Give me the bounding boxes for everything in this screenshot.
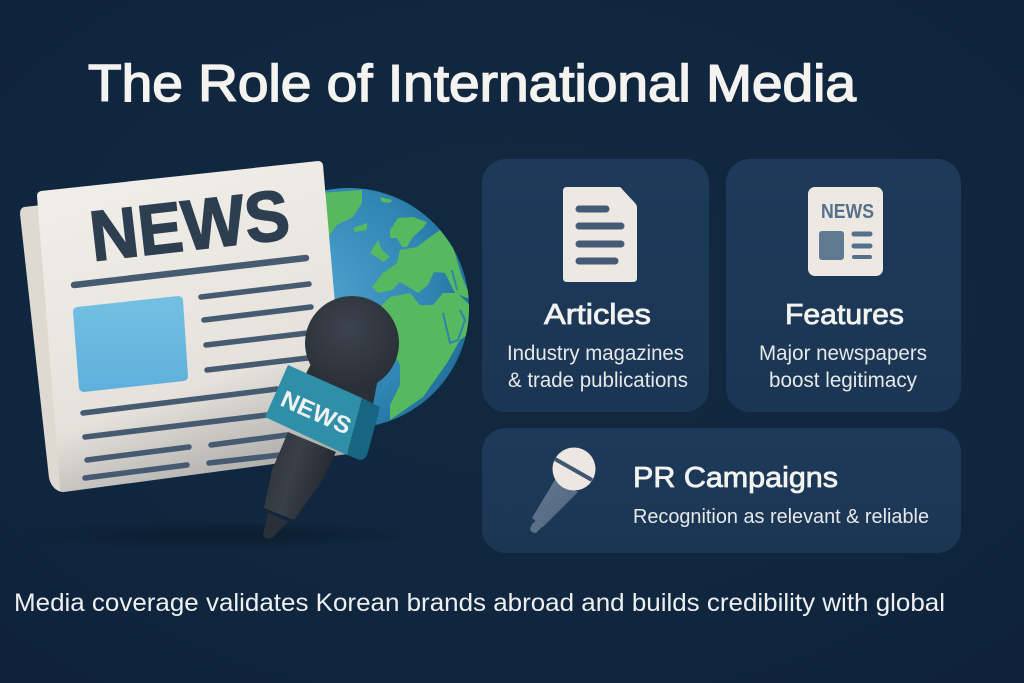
head: [305, 296, 399, 390]
icon: document: [563, 187, 637, 282]
handle: [264, 432, 336, 520]
icon: mini newspaper: [808, 187, 883, 276]
masthead: NEWS: NEWS: [86, 176, 294, 277]
news photo: [73, 296, 188, 392]
text: features description: [759, 342, 927, 392]
infographic canvas: [16, 62, 961, 616]
text: articles description: [507, 342, 688, 392]
article lines: [74, 258, 311, 478]
panel: PR campaigns: [482, 428, 961, 553]
icon: microphone: [263, 296, 399, 539]
text: features description: Major newspapers: [759, 342, 927, 365]
icon: mini newspaper: NEWS: [821, 201, 874, 223]
icon: newspaper: [20, 161, 348, 492]
caption: Media coverage validates Korean brands abroad and builds credibility with global: [14, 589, 945, 617]
heading: features: Features: [785, 299, 904, 331]
microphone flag: NEWS: [277, 386, 355, 440]
text: features description: boost legitimacy: [769, 369, 917, 392]
neck: [300, 362, 378, 410]
text: PR campaigns description: Recognition as relevant & reliable: [633, 506, 929, 528]
title: The Role of International Media: [88, 55, 856, 113]
back page fold: [20, 203, 70, 492]
heading: articles: Articles: [544, 299, 651, 331]
microphone flag: [265, 365, 380, 460]
panel: features: [726, 159, 961, 412]
icon: globe: [325, 188, 469, 428]
text: articles description: & trade publications: [508, 369, 688, 392]
illustration: newspaper, globe and microphone: [20, 161, 472, 549]
panel: articles: [482, 159, 709, 412]
text: articles description: Industry magazines: [507, 342, 684, 365]
heading: PR campaigns: PR Campaigns: [633, 462, 838, 494]
icon: handheld microphone: [530, 448, 596, 533]
